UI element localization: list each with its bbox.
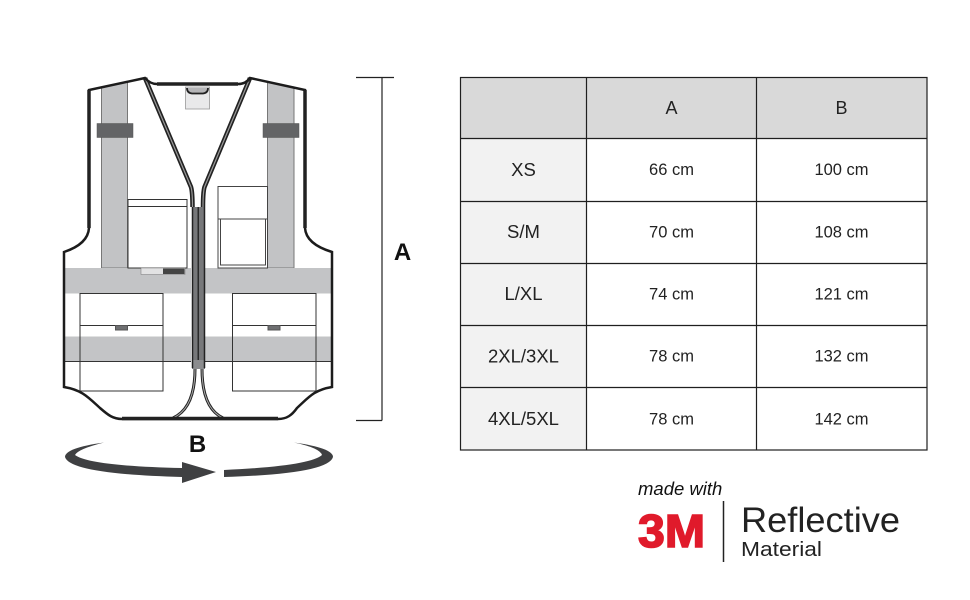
Material: Material — [741, 538, 822, 561]
header fills — [460, 77, 927, 138]
size labels: S/M — [507, 221, 540, 242]
placket curves — [173, 369, 223, 418]
lower right pocket — [232, 294, 316, 391]
size labels: XS — [511, 159, 536, 180]
lower left pocket — [80, 294, 163, 391]
arrow B circumference — [65, 442, 333, 483]
column A values: 66 cm — [649, 161, 694, 179]
upper left pocket — [128, 200, 187, 268]
table grid — [460, 78, 927, 450]
lower band edge lines — [65, 360, 331, 362]
label B: B — [189, 431, 206, 458]
reflective horizontal bands — [65, 268, 331, 362]
column headers: B — [835, 98, 848, 118]
column A values: 74 cm — [649, 286, 694, 304]
column B values: 132 cm — [814, 348, 869, 366]
label A: A — [394, 239, 411, 266]
thick side and collar edges — [89, 84, 305, 418]
reflective shoulder straps — [102, 82, 294, 268]
3M mark: 3M — [638, 505, 705, 557]
column B values — [814, 161, 869, 428]
size column fills — [461, 139, 586, 450]
column B values: 142 cm — [814, 410, 869, 428]
column B values: 100 cm — [814, 161, 869, 179]
size labels: L/XL — [504, 283, 543, 304]
size labels: 2XL/3XL — [488, 346, 559, 366]
column A values — [649, 161, 694, 428]
3M logo block — [638, 478, 900, 562]
zipper — [192, 207, 205, 369]
column B values: 121 cm — [814, 286, 869, 304]
size table — [460, 77, 927, 450]
size labels — [488, 159, 559, 429]
column A values: 78 cm — [649, 348, 694, 366]
column A values: 78 cm — [649, 410, 694, 428]
V neck binding — [145, 78, 250, 207]
upper right pocket — [218, 186, 268, 268]
vest outline — [64, 78, 332, 419]
column headers: A — [665, 98, 678, 118]
size labels: 4XL/5XL — [488, 408, 559, 429]
dimension A line — [356, 78, 394, 420]
shoulder loops — [97, 124, 299, 138]
column A values: 70 cm — [649, 224, 694, 242]
column headers — [665, 98, 848, 118]
divider — [722, 501, 724, 562]
vest diagram — [64, 78, 332, 419]
made with: made with — [638, 478, 722, 499]
column B values: 108 cm — [814, 224, 869, 242]
hanger tab — [186, 87, 210, 109]
Reflective: Reflective — [741, 501, 900, 540]
garment label — [141, 268, 185, 274]
